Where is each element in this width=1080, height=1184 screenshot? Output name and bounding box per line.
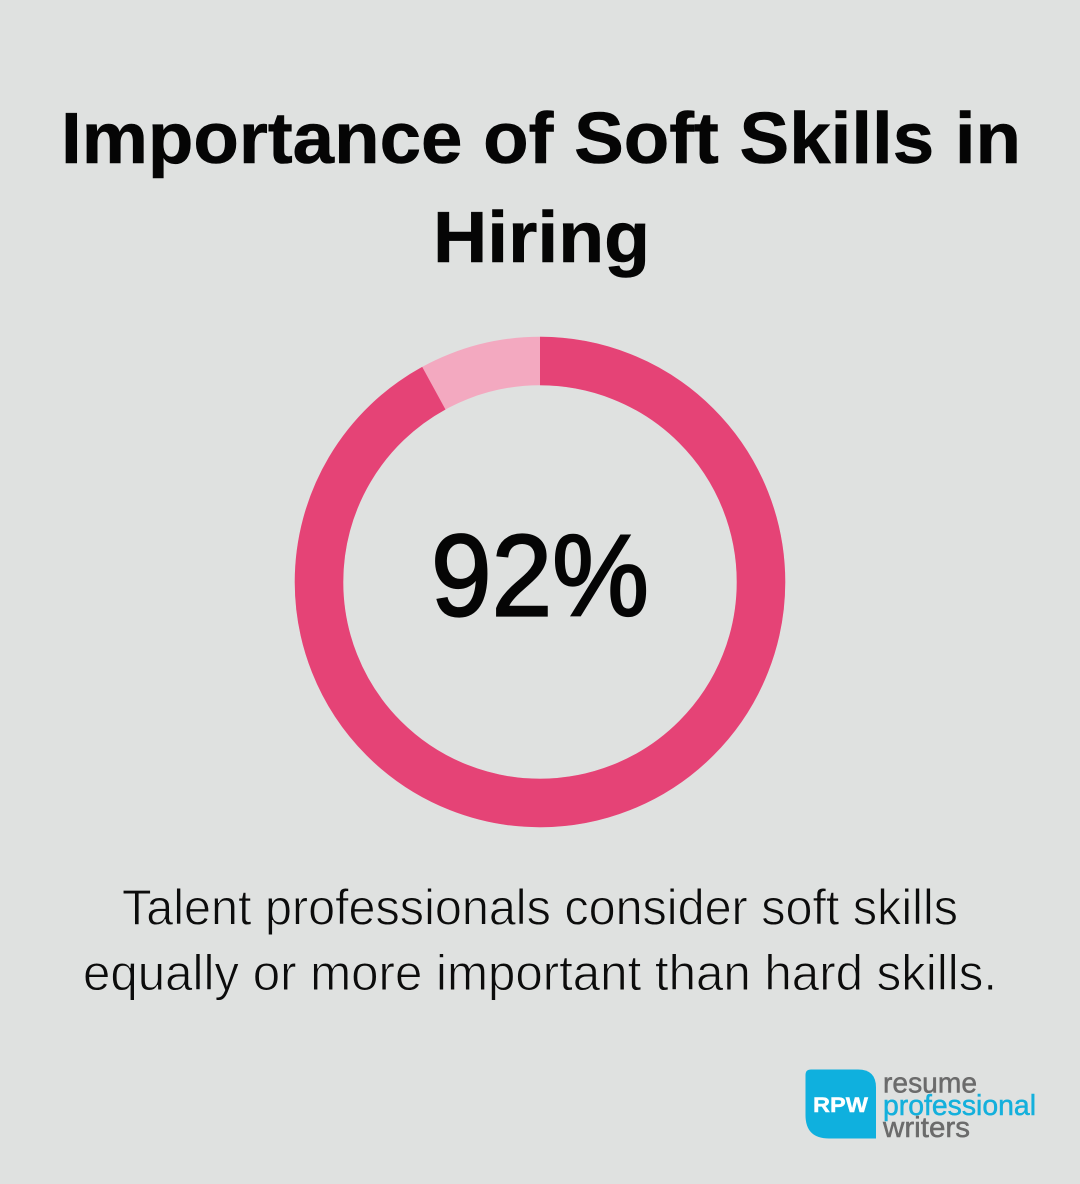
title: Importance of Soft Skills in (61, 99, 1021, 179)
description text: Talent professionals consider soft skills (122, 880, 958, 936)
logo initials: RPW (813, 1094, 868, 1117)
logo: resume professional writers (806, 1068, 1036, 1144)
logo wordmark: resume (883, 1068, 977, 1100)
logo wordmark: professional (883, 1090, 1036, 1122)
logo wordmark (882, 1068, 1036, 1144)
title (61, 99, 1021, 278)
title: Hiring (433, 198, 650, 278)
description text: equally or more important than hard skills. (83, 945, 997, 1001)
description text (83, 880, 997, 1001)
donut chart: 92 percent (319, 361, 761, 803)
logo wordmark: writers (882, 1112, 970, 1144)
donut value: 92% (431, 510, 649, 640)
logo badge (806, 1070, 876, 1138)
